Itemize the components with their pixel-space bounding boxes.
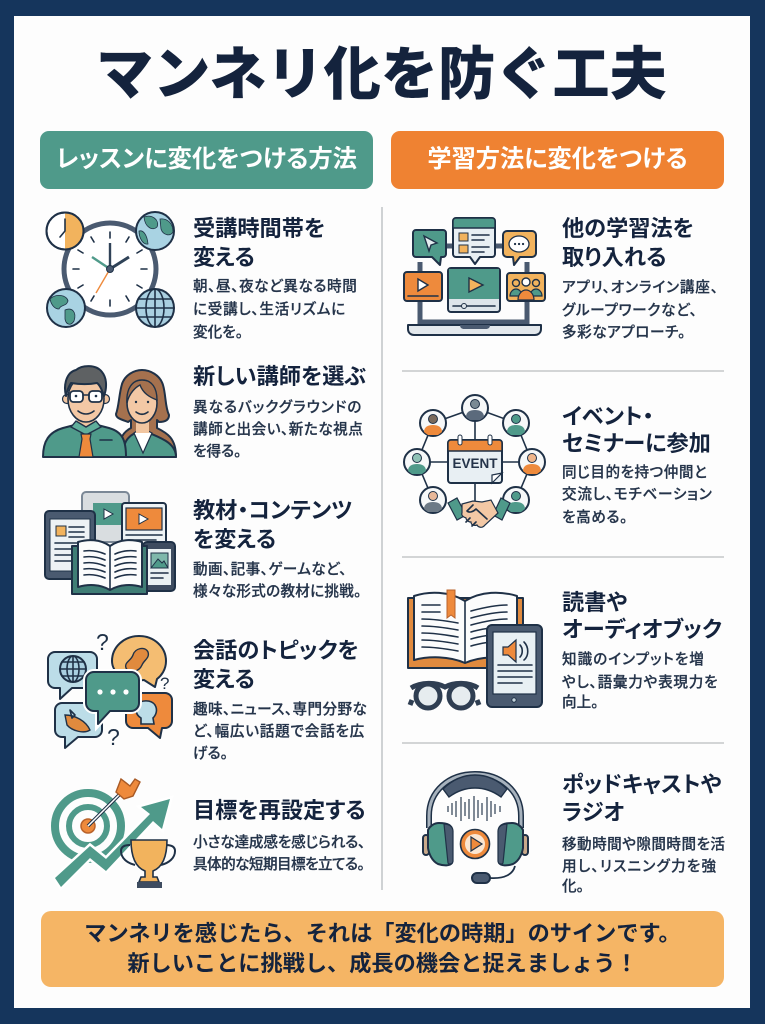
text: 会話のトピックを変える: 会話のトピックを bbox=[193, 638, 359, 663]
text: 教材・コンテンツを変える: 教材・コンテンツ bbox=[193, 498, 353, 523]
text: 目標を再設定する bbox=[193, 798, 366, 873]
text: 読書やオーディオブック: 読書や bbox=[562, 590, 627, 615]
icon: two teachers bbox=[42, 365, 177, 458]
text: 受講時間帯を変える: 朝、昼、夜など異なる時間 bbox=[193, 279, 357, 295]
title: マンネリ化を防ぐ工夫 bbox=[96, 43, 667, 107]
text: 受講時間帯を変える: 受講時間帯を bbox=[193, 216, 325, 241]
icon: clock and globes bbox=[46, 211, 175, 328]
text: 会話のトピックを変える: げる。 bbox=[193, 746, 228, 762]
text: 教材・コンテンツを変える: を変える bbox=[193, 527, 276, 552]
text: 他の学習法を取り入れる bbox=[562, 216, 719, 341]
text: 目標を再設定する: 小さな達成感を感じられる、 bbox=[193, 835, 365, 851]
icon: devices and book bbox=[44, 491, 176, 595]
text: 他の学習法を取り入れる: 他の学習法を bbox=[562, 216, 694, 241]
callout banner bbox=[41, 911, 724, 987]
icon: chat bubbles: ? bbox=[107, 724, 120, 750]
text: 読書やオーディオブック: やし、語彙力や表現力を bbox=[562, 675, 718, 691]
icon: chat bubbles bbox=[47, 629, 173, 750]
right column header: 学習方法に変化をつける bbox=[427, 146, 688, 173]
text: 目標を再設定する: 目標を再設定する bbox=[193, 798, 366, 823]
text: 他の学習法を取り入れる: 多彩なアプローチ。 bbox=[562, 325, 686, 341]
text: イベント・セミナーに参加: 交流し、モチベーション bbox=[562, 487, 712, 503]
text: 会話のトピックを変える bbox=[193, 638, 367, 762]
text: イベント・セミナーに参加 bbox=[562, 404, 712, 526]
text: ポッドキャストやラジオ: 用し、リスニング力を強 bbox=[562, 859, 717, 875]
text: ポッドキャストやラジオ: ラジオ bbox=[562, 800, 625, 825]
text: 教材・コンテンツを変える bbox=[193, 498, 362, 600]
text: 新しい講師を選ぶ bbox=[193, 364, 366, 460]
icon: headphones bbox=[422, 771, 529, 884]
text: 新しい講師を選ぶ: 講師と出会い、新たな視点 bbox=[193, 422, 363, 438]
callout banner: 新しいことに挑戦し、成長の機会と捉えましょう！ bbox=[127, 951, 638, 976]
icon: laptop with learning apps bbox=[403, 217, 546, 336]
icon: book, tablet and glasses bbox=[407, 590, 543, 710]
text: イベント・セミナーに参加: 同じ目的を持つ仲間と bbox=[562, 465, 707, 481]
text: ポッドキャストやラジオ bbox=[562, 772, 725, 895]
text: ポッドキャストやラジオ: ポッドキャストや bbox=[562, 772, 722, 797]
text: ポッドキャストやラジオ: 化。 bbox=[562, 879, 584, 895]
icon: target, arrow and trophy bbox=[51, 778, 176, 888]
text: 読書やオーディオブック: 知識のインプットを増 bbox=[562, 652, 705, 668]
text: 他の学習法を取り入れる: アプリ、オンライン講座、 bbox=[562, 280, 719, 296]
text: 会話のトピックを変える: 趣味、ニュース、専門分野な bbox=[193, 702, 367, 718]
row divider 1 bbox=[402, 370, 724, 372]
text: 受講時間帯を変える: 変える bbox=[193, 245, 255, 270]
text: 新しい講師を選ぶ: を得る。 bbox=[193, 444, 241, 460]
icon: event network: EVENT bbox=[452, 456, 498, 471]
row divider 2 bbox=[402, 556, 724, 558]
callout banner: マンネリを感じたら、それは「変化の時期」のサインです。 bbox=[84, 921, 681, 946]
text: 会話のトピックを変える: ど、幅広い話題で会話を広 bbox=[193, 724, 365, 740]
text: 読書やオーディオブック bbox=[562, 590, 722, 711]
text: 目標を再設定する: 具体的な短期目標を立てる。 bbox=[193, 857, 364, 873]
text: ポッドキャストやラジオ: 移動時間や隙間時間を活 bbox=[562, 837, 725, 853]
text: 新しい講師を選ぶ: 新しい講師を選ぶ bbox=[193, 364, 366, 389]
text: 教材・コンテンツを変える: 動画、記事、ゲームなど、 bbox=[193, 562, 347, 578]
text: 受講時間帯を変える: 変化を。 bbox=[193, 325, 243, 341]
row divider 3 bbox=[402, 742, 724, 744]
text: イベント・セミナーに参加: セミナーに参加 bbox=[562, 431, 711, 456]
text: イベント・セミナーに参加: イベント・ bbox=[562, 404, 654, 429]
text: 他の学習法を取り入れる: グループワークなど、 bbox=[562, 303, 698, 319]
text: 教材・コンテンツを変える: 様々な形式の教材に挑戦。 bbox=[193, 584, 362, 600]
icon: chat bubbles: ? bbox=[160, 674, 169, 693]
left column header: レッスンに変化をつける方法 bbox=[56, 146, 357, 173]
text: 読書やオーディオブック: 向上。 bbox=[562, 695, 598, 711]
icon: chat bubbles: ? bbox=[96, 629, 109, 655]
text: 新しい講師を選ぶ: 異なるバックグラウンドの bbox=[193, 400, 362, 416]
text: 受講時間帯を変える: に受講し、生活リズムに bbox=[193, 302, 346, 318]
text: 会話のトピックを変える: 変える bbox=[193, 667, 255, 692]
column divider bbox=[381, 207, 383, 890]
icon: event network bbox=[403, 394, 546, 528]
text: イベント・セミナーに参加: を高める。 bbox=[562, 510, 628, 526]
right column header bbox=[391, 131, 724, 189]
text: 受講時間帯を変える bbox=[193, 216, 357, 341]
left column header bbox=[40, 131, 373, 189]
text: 読書やオーディオブック: オーディオブック bbox=[562, 617, 722, 642]
text: 他の学習法を取り入れる: 取り入れる bbox=[562, 245, 666, 270]
